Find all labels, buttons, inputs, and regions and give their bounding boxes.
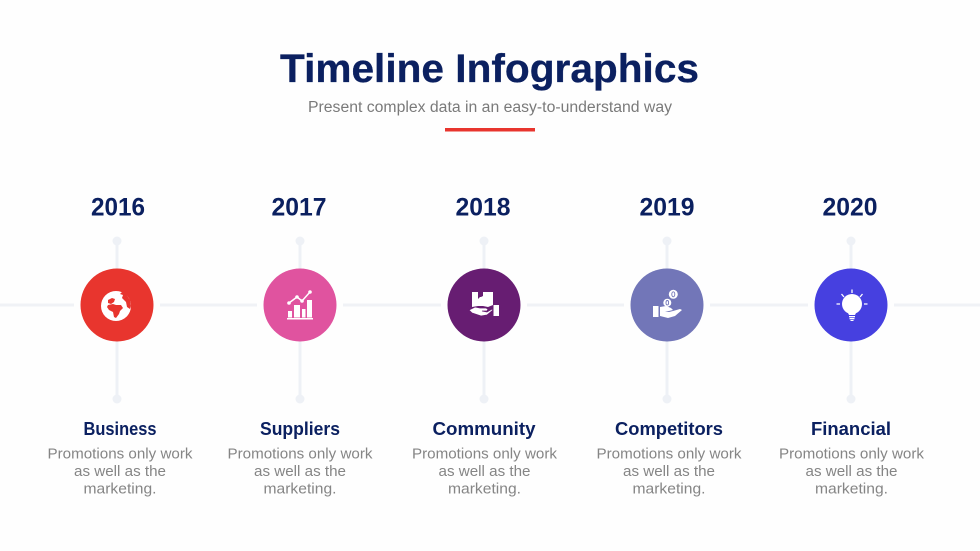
connector 2016 — [112, 236, 122, 404]
description Business — [48, 446, 193, 498]
description Community — [412, 446, 558, 498]
description Competitors: as well as the — [623, 463, 715, 480]
label Financial: Financial — [811, 418, 891, 439]
icon: globe — [101, 291, 131, 321]
label Business: Business — [84, 418, 156, 439]
node circle 2019 — [630, 268, 704, 342]
description Business: marketing. — [84, 480, 156, 498]
description Suppliers: Promotions only work — [228, 446, 373, 462]
description Community: Promotions only work — [412, 446, 558, 462]
icon: light bulb — [836, 290, 868, 321]
icon: hand holding box — [469, 292, 499, 316]
node circle 2016 — [80, 268, 154, 342]
label Competitors: Competitors — [615, 418, 723, 439]
icon: growth chart — [287, 290, 313, 320]
description Suppliers — [228, 446, 373, 498]
node circle 2018 — [448, 268, 520, 342]
milestone: 2017 Suppliers — [228, 194, 373, 498]
horizontal timeline axis — [0, 304, 980, 306]
description Community: as well as the — [438, 463, 530, 480]
year 2016: 2016 — [91, 194, 145, 222]
label Community: Community — [432, 418, 536, 439]
description Business: Promotions only work — [48, 446, 193, 462]
subtitle: Present complex data in an easy-to-understand way — [308, 99, 672, 116]
year 2020: 2020 — [822, 194, 878, 222]
description Competitors: marketing. — [632, 480, 706, 498]
description Financial: marketing. — [815, 480, 888, 498]
icon: hand with coins — [653, 290, 682, 318]
connector 2017 — [296, 236, 304, 404]
label Suppliers: Suppliers — [260, 418, 340, 439]
year 2019: 2019 — [640, 194, 694, 222]
description Financial: as well as the — [806, 463, 898, 480]
connector 2018 — [480, 236, 488, 404]
milestone: 2020 Financial — [779, 194, 925, 498]
milestone: 2016 Business — [48, 194, 193, 498]
year 2018: 2018 — [456, 194, 511, 222]
milestone: 2018 Community — [412, 194, 558, 498]
connector 2019 — [662, 236, 672, 404]
year 2017: 2017 — [272, 194, 326, 222]
description Financial: Promotions only work — [779, 446, 925, 462]
node circle 2017 — [264, 268, 336, 342]
description Competitors — [596, 446, 742, 498]
description Community: marketing. — [448, 480, 521, 498]
title accent bar — [445, 128, 535, 132]
description Suppliers: marketing. — [264, 480, 336, 498]
milestone: 2019 Competitors — [596, 194, 742, 498]
node circle 2020 — [814, 268, 888, 342]
description Competitors: Promotions only work — [596, 446, 742, 462]
description Suppliers: as well as the — [254, 463, 346, 480]
connector 2020 — [846, 236, 856, 404]
description Financial — [779, 446, 925, 498]
description Business: as well as the — [74, 463, 166, 480]
title: Timeline Infographics — [280, 47, 699, 91]
